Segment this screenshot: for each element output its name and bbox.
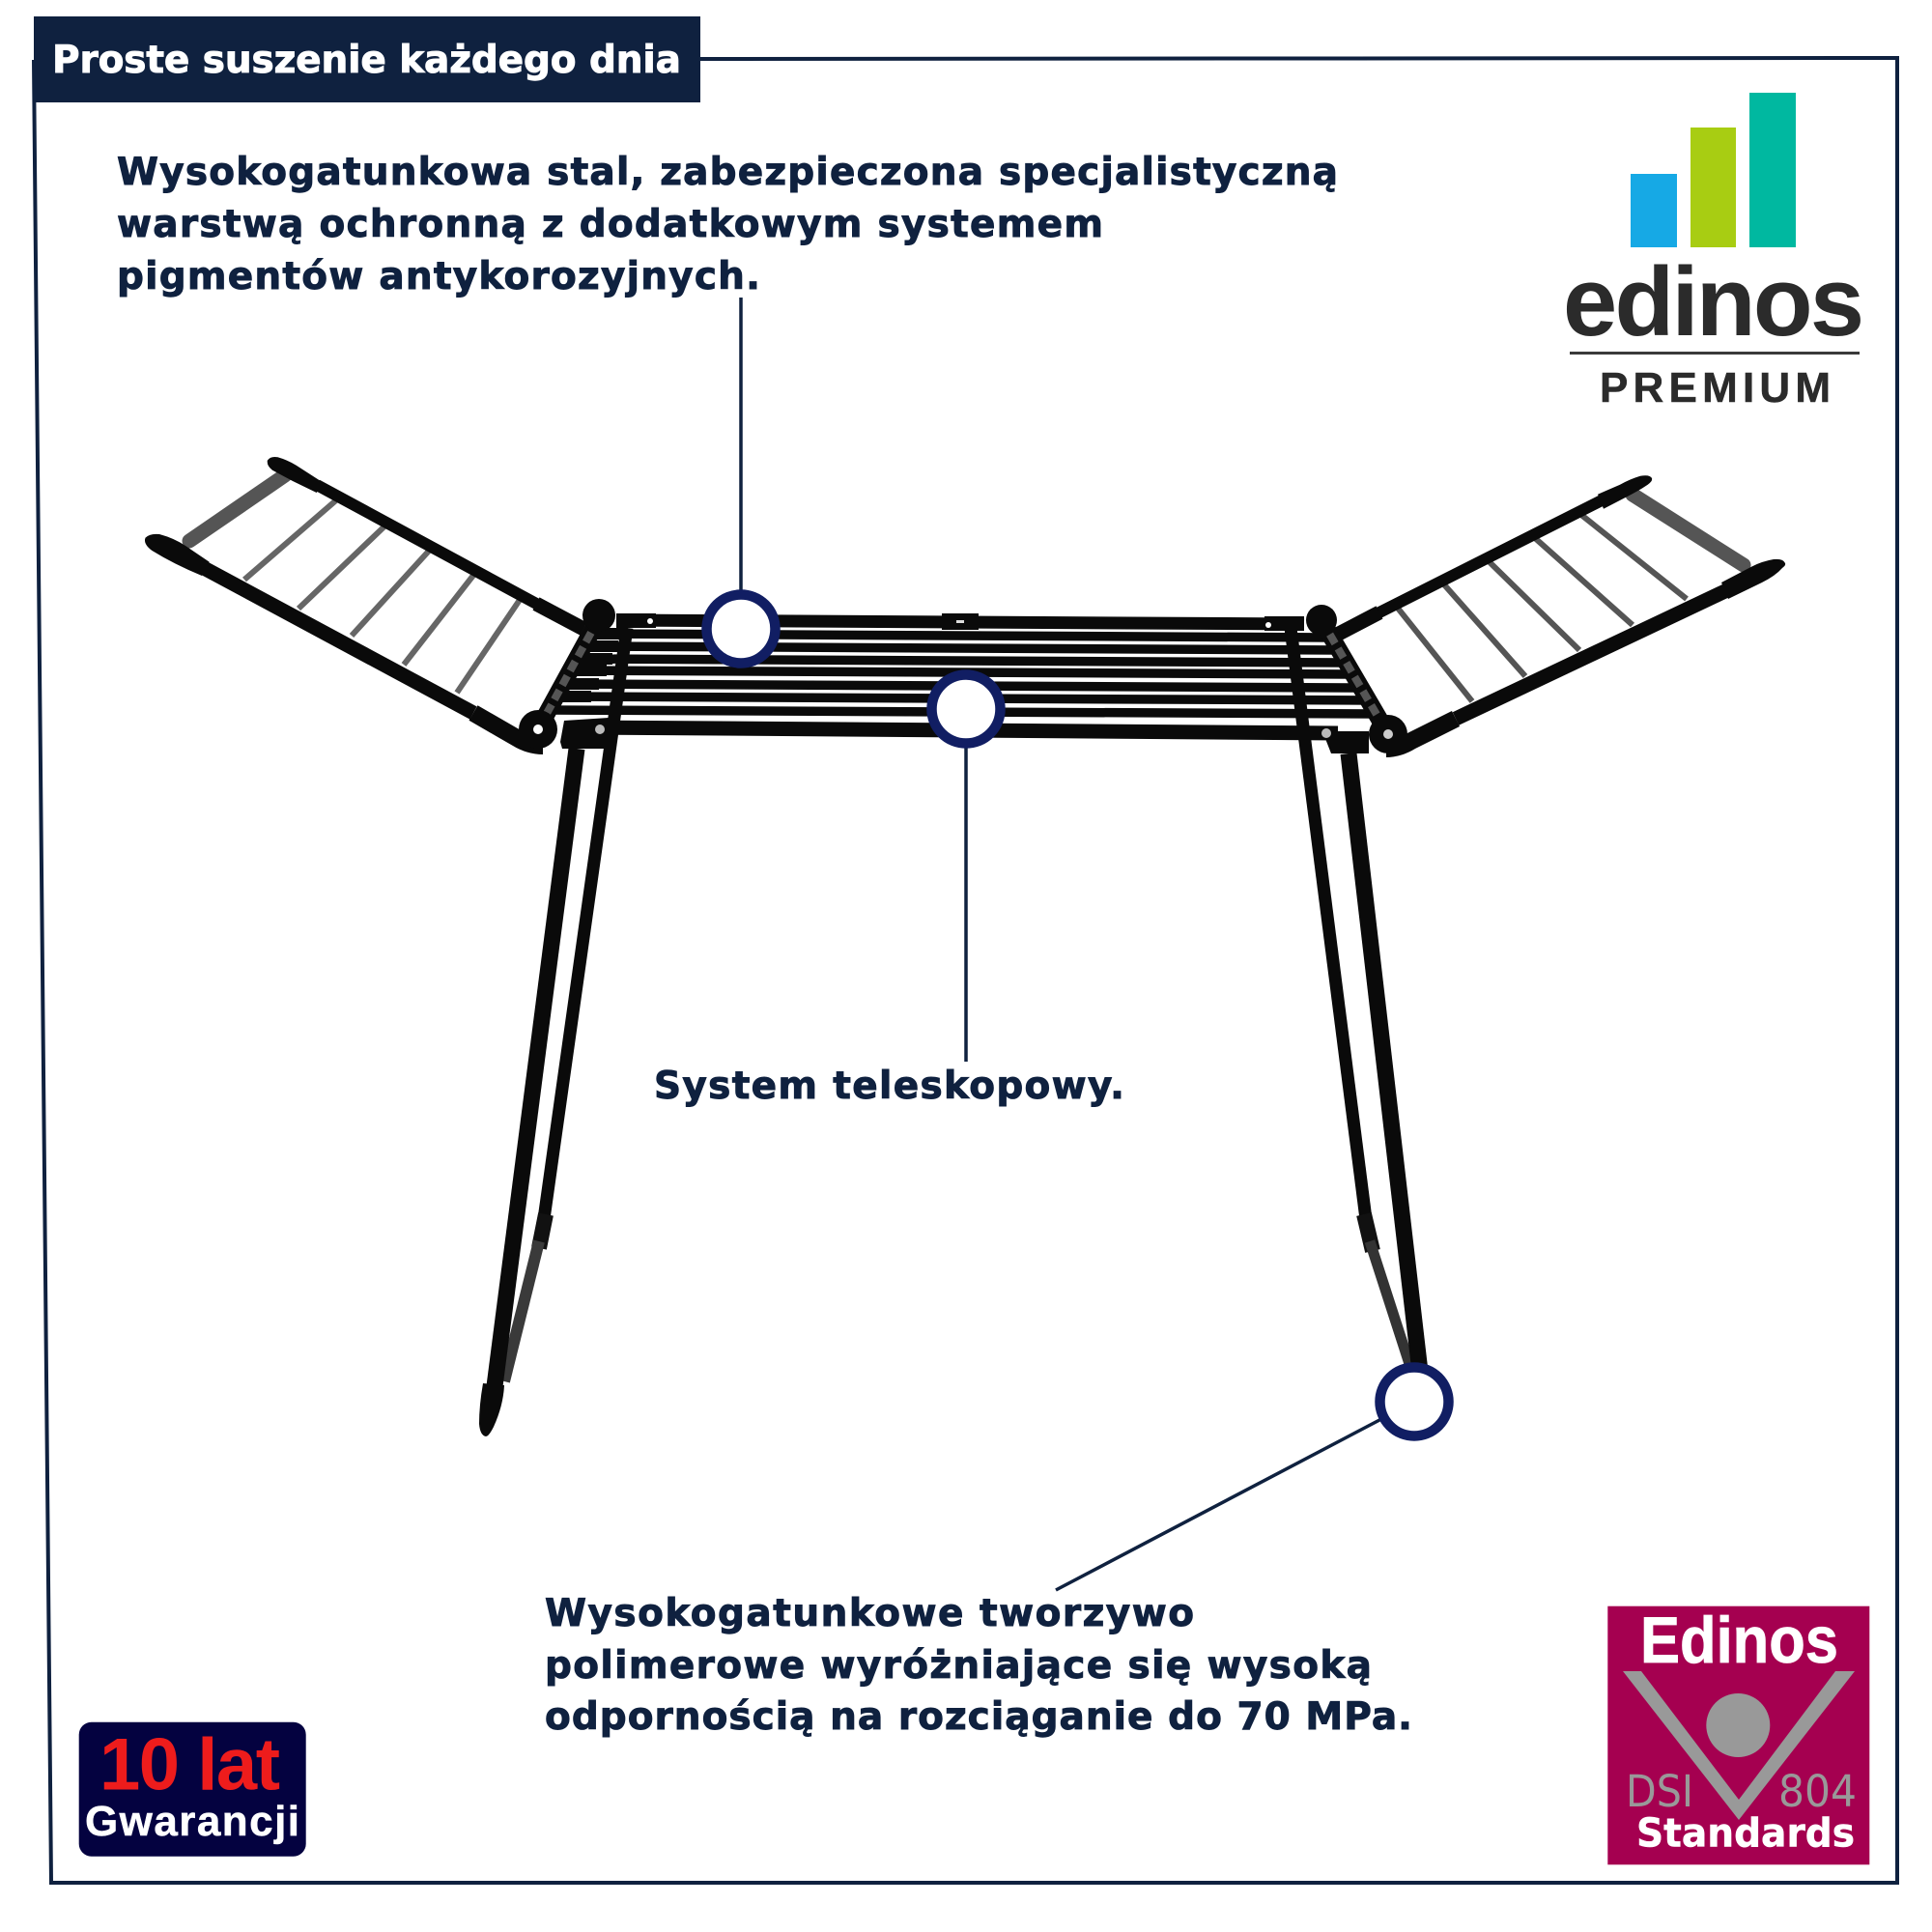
brackets and hubs	[519, 599, 1407, 753]
telescopic rods	[550, 620, 1376, 733]
text block: steel description: pigmentów antykorozyjnych.	[117, 255, 760, 298]
marker ring: polymer	[1379, 1368, 1449, 1435]
hinge bars	[538, 618, 1388, 734]
badge: Edinos DSI 804 standards	[1607, 1604, 1869, 1864]
legs	[479, 628, 1420, 1436]
logo: edinos premium	[1563, 93, 1864, 412]
title banner	[34, 16, 700, 102]
marker ring: telescopic	[931, 674, 1001, 744]
badge: Edinos DSI 804 standards: Edinos	[1640, 1604, 1838, 1677]
logo: edinos premium: PREMIUM	[1600, 364, 1831, 412]
badge: Edinos DSI 804 standards: 804	[1778, 1766, 1857, 1817]
text block: polymer description: polimerowe wyróżniające się wysoką	[545, 1644, 1372, 1688]
logo: edinos premium: edinos	[1563, 248, 1864, 356]
text block: polymer description: Wysokogatunkowe tworzywo	[545, 1592, 1194, 1635]
badge: 10 year warranty: 10 lat	[99, 1724, 280, 1806]
badge: 10 year warranty	[79, 1722, 306, 1857]
text block: steel description	[117, 151, 1338, 298]
text block: polymer description	[545, 1592, 1412, 1739]
badge: Edinos DSI 804 standards: Standards	[1636, 1810, 1855, 1857]
callout line: steel	[739, 298, 743, 594]
title banner: Proste suszenie każdego dnia	[52, 39, 681, 82]
marker ring: steel	[707, 595, 775, 663]
callout line: telescopic	[964, 744, 968, 1062]
text block: telescopic system: System teleskopowy.	[654, 1065, 1124, 1108]
badge: Edinos DSI 804 standards: DSI	[1626, 1766, 1693, 1817]
callout line: polymer	[1056, 1419, 1381, 1590]
badge: 10 year warranty: Gwarancji	[85, 1798, 299, 1845]
text block: polymer description: odpornością na rozciąganie do 70 MPa.	[545, 1695, 1412, 1739]
text block: steel description: Wysokogatunkowa stal, zabezpieczona specjalistyczną	[117, 151, 1338, 194]
right wing	[1335, 475, 1785, 749]
text block: steel description: warstwą ochronną z dodatkowym systemem	[117, 203, 1103, 246]
drying rack illustration	[145, 457, 1785, 1436]
left wing	[145, 457, 583, 746]
